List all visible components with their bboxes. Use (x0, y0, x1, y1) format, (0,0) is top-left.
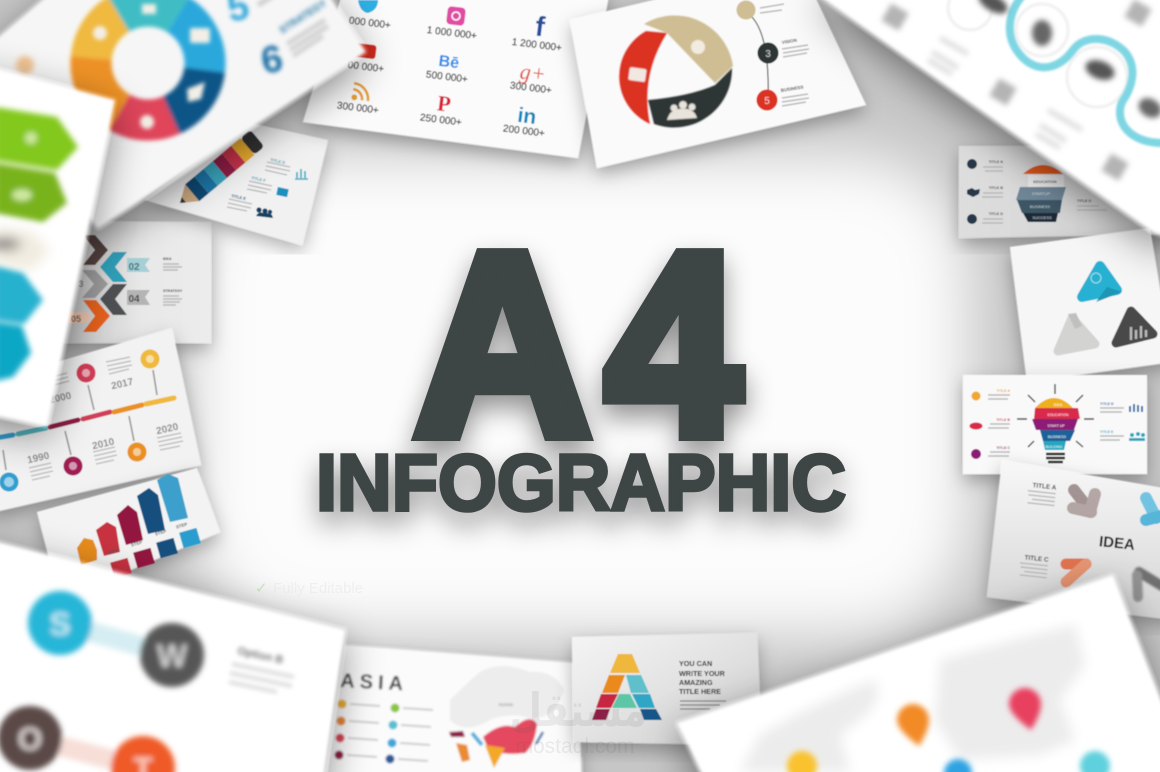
icons: left (970, 392, 982, 459)
letter W (140, 623, 204, 687)
panel: SWOT card (0, 535, 345, 772)
timeline bar (0, 398, 174, 438)
panel: step arrows card (37, 468, 220, 600)
timeline years: 2010 (91, 437, 116, 452)
label: right side: TITLE D (1077, 199, 1092, 203)
panel: pie chart card (570, 0, 866, 168)
numbered timeline (736, 0, 809, 110)
icon: orange petals (1066, 564, 1086, 582)
light bulb stack (1032, 398, 1080, 462)
head stack: BUSINESS (1030, 204, 1050, 209)
panel: pencil card (145, 123, 328, 245)
timeline years: 1990 (26, 451, 51, 466)
follower counts: 250 000+ (419, 112, 462, 129)
icon: google plus: g+ (519, 59, 547, 86)
option text (229, 645, 294, 692)
step labels: STEP (107, 548, 120, 556)
blurred text blocks (928, 38, 1082, 148)
light rays (1017, 384, 1094, 447)
follower counts: 1 000 000+ (426, 25, 478, 42)
title: A4: A (414, 200, 591, 490)
callout: amazing title: TITLE HERE (679, 687, 721, 696)
callout: amazing title: WRITE YOUR (679, 669, 726, 678)
heading: ASIA: ASIA (340, 670, 409, 696)
step labels (163, 257, 183, 305)
labels: left column: TITLE A (989, 160, 1003, 164)
numbered timeline: VISION (781, 38, 797, 45)
numbered timeline: 3 (765, 49, 771, 60)
connector: S to W (60, 623, 172, 655)
arrow columns (77, 474, 188, 565)
panel: left green arrows card (0, 62, 115, 426)
follower counts: 500 000+ (425, 69, 468, 86)
panel: head infographic card (959, 146, 1160, 238)
icon: brown petals (1073, 490, 1095, 512)
icon: youtube (353, 43, 377, 59)
icon: twitter (358, 0, 378, 13)
follower counts (336, 15, 563, 140)
panel: arrow steps card (58, 221, 211, 343)
word: IDEA: IDEA (1098, 533, 1136, 554)
labels: left column: TITLE B (989, 186, 1003, 190)
blurred icons (881, 0, 1160, 181)
step labels: STEP (154, 529, 167, 537)
pencil labels (227, 157, 308, 218)
follower counts: 000 000+ (348, 15, 391, 32)
labels: left (988, 389, 1010, 456)
light bulb stack: BUILDING (1046, 445, 1063, 449)
timeline nodes (0, 350, 160, 492)
faint watermark: mostaql: mostaql.com (515, 735, 635, 758)
Asia map: RUSSIA (499, 703, 514, 707)
follower counts: 1 200 000+ (511, 37, 563, 54)
wheel icons (93, 4, 210, 129)
labels: left column (982, 160, 1003, 223)
icon: gray petals (1137, 572, 1160, 597)
connector: O to T (30, 738, 143, 768)
pencil labels: TITLE F (251, 175, 267, 183)
icon: pinterest: P (436, 90, 452, 117)
letter T (111, 736, 175, 772)
label: title C: TITLE C (1024, 554, 1049, 564)
callout: amazing title: AMAZING (679, 678, 713, 687)
icon: mosaic letter A (592, 654, 662, 720)
step labels: IDEA (163, 257, 172, 261)
icon: behance: Bē (438, 53, 460, 72)
callout: amazing title: YOU CAN (679, 659, 712, 668)
timeline years: 2000 (48, 391, 73, 406)
letter O (0, 706, 62, 770)
label: title C (1019, 554, 1049, 578)
teal arrows (0, 266, 43, 381)
faint ghost caption: Fully Editable (273, 580, 363, 597)
chevron steps (65, 235, 150, 332)
follower counts: 300 000+ (509, 80, 552, 97)
icon: dark gray triangle (1116, 311, 1153, 343)
legend (334, 700, 433, 764)
caption lines (680, 701, 726, 709)
letter S (28, 591, 92, 655)
labels: left: TITLE B (996, 418, 1010, 422)
head stack (1016, 165, 1066, 222)
step labels (107, 522, 188, 556)
step labels: STRATEGY (163, 289, 183, 293)
timeline years (26, 377, 180, 466)
panel: top left wheel card (0, 0, 366, 228)
timeline years: 2017 (110, 377, 135, 392)
icon: instagram (446, 6, 466, 26)
labels: left column: TITLE D (989, 212, 1003, 216)
numbered timeline: BUSINESS (780, 84, 804, 93)
panel: timeline card (0, 328, 201, 513)
option text: Option B (236, 645, 284, 667)
panel: top right wave card (818, 0, 1160, 240)
wheel diagram (91, 6, 205, 120)
icon: facebook: f (534, 11, 547, 43)
panel: world map card (677, 575, 1160, 772)
Asia map (449, 666, 564, 768)
green arrows (0, 107, 78, 222)
title: INFOGRAPHIC: INFOGRAPHIC (316, 438, 846, 527)
icons: left column (967, 159, 980, 224)
labels and icons: right: TITLE D (1100, 402, 1114, 406)
panel: social media counts card (303, 0, 610, 158)
icon: light gray triangle (1058, 313, 1095, 351)
callout: amazing title (679, 659, 726, 696)
map blobs (740, 625, 1085, 772)
icon: blue triangle (1082, 266, 1122, 302)
light bulb stack: EDUCATION (1048, 413, 1069, 417)
faint rings (948, 0, 1127, 107)
light bulb stack: IDEA (1054, 403, 1063, 407)
light bulb stack: BUSINESS (1048, 435, 1067, 439)
label: title A (1027, 482, 1057, 506)
labels and icons: right (1100, 402, 1145, 441)
icon: blue petals (1146, 498, 1160, 520)
faint ghost caption: ✓ (255, 580, 268, 597)
timeline captions (29, 357, 183, 480)
numbered timeline: 5 (764, 96, 770, 107)
timeline years: 2020 (155, 422, 180, 437)
pencil labels: TITLE D (270, 157, 286, 165)
step tiles (110, 528, 201, 578)
panel: Asia map card (322, 645, 582, 772)
chevron steps: 02 (128, 262, 140, 273)
timeline stems (3, 370, 157, 470)
numbered items (224, 0, 329, 83)
beige arrow (0, 226, 50, 270)
panel: light bulb card (963, 375, 1147, 474)
follower counts: 00 000+ (347, 60, 385, 75)
faint watermark: mostaql (510, 683, 646, 758)
wave line (1010, 0, 1160, 143)
label: right side (1077, 199, 1107, 210)
head stack: STARTUP (1032, 191, 1050, 196)
title: A4: 4 (605, 200, 743, 490)
faint watermark: mostaql: مستقل (510, 683, 646, 737)
numbered items: 6 (258, 38, 286, 83)
head stack: SUCCESS (1032, 215, 1052, 220)
icon: colored pencil (173, 130, 264, 211)
pencil labels: TITLE E (231, 193, 247, 201)
panel: idea card (987, 460, 1160, 620)
pie chart (619, 15, 733, 128)
title: A4 (414, 200, 743, 490)
head stack: EDUCATION (1033, 179, 1057, 184)
labels: left: TITLE A (997, 389, 1010, 393)
chevron steps: 3 (78, 279, 84, 289)
labels and icons: right: TITLE E (1100, 430, 1114, 434)
panel: triangles card (1010, 228, 1160, 382)
step labels: STEP (130, 540, 143, 548)
letter W: W (157, 638, 188, 674)
labels: left: TITLE C (996, 446, 1010, 450)
letter S: S (49, 606, 71, 642)
letter O: O (18, 721, 42, 757)
follower counts: 200 000+ (502, 123, 545, 140)
step labels: STEP (175, 522, 188, 530)
chevron steps: 05 (71, 314, 81, 324)
blurred side icon (16, 56, 34, 74)
panel: letter A card (572, 633, 762, 745)
label: title A: TITLE A (1032, 482, 1057, 492)
map pins (787, 688, 1110, 772)
chevron steps: 04 (128, 294, 140, 305)
follower counts: 300 000+ (336, 100, 379, 117)
icon: linkedin: in (516, 104, 538, 129)
light bulb stack: START UP (1047, 424, 1065, 428)
icon: rss (352, 83, 370, 101)
